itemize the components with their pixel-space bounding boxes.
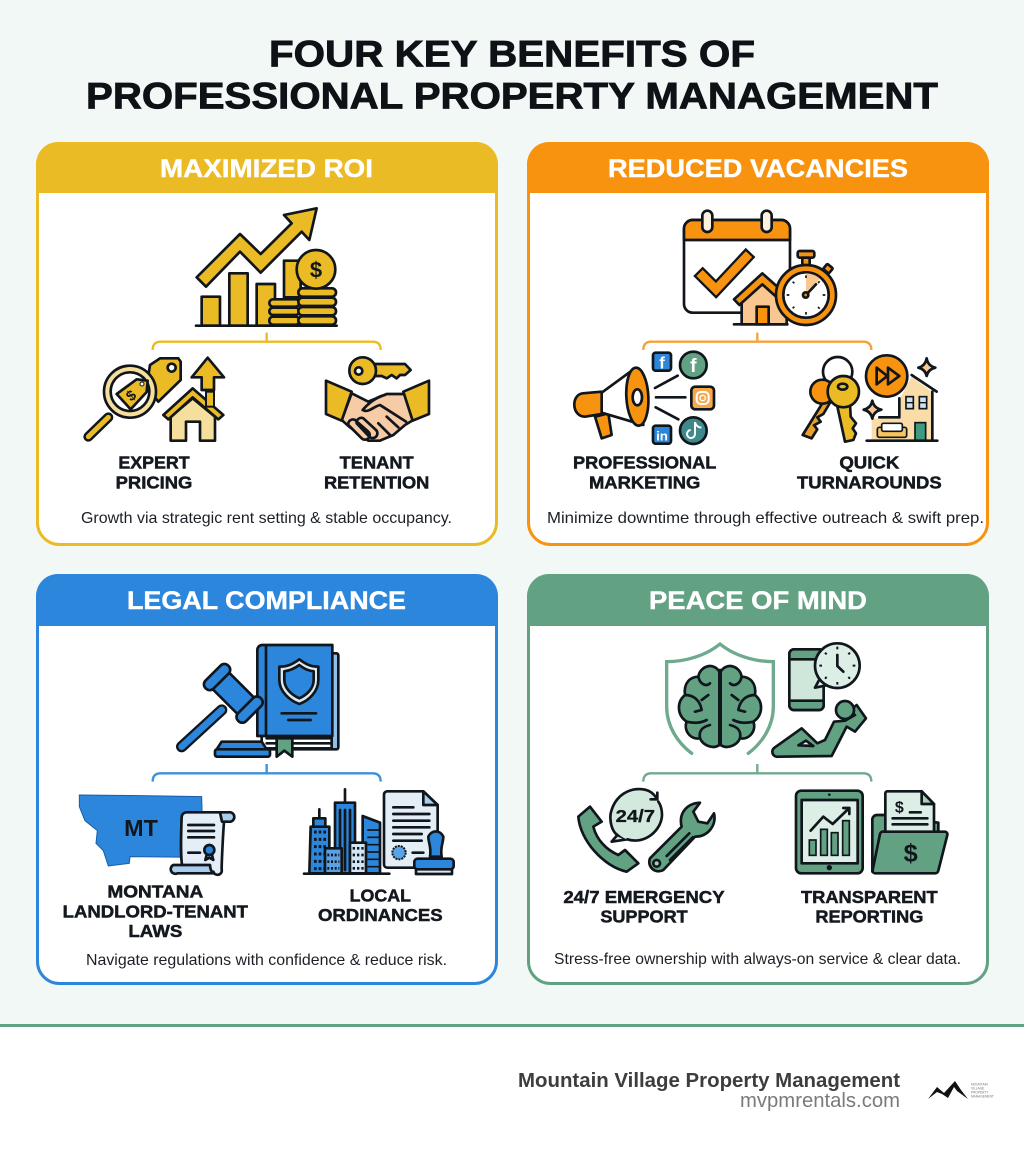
label: Montana line 2: LANDLORD-TENANT: [63, 901, 248, 921]
icon: growth chart with coins: $: [310, 257, 322, 282]
label: Montana landlord-tenant laws: MONTANA: [107, 882, 203, 902]
panel contents: reduced vacancies: [573, 211, 942, 492]
panel header: legal compliance: [36, 574, 498, 626]
icon: tablet report and folder: $: [895, 799, 904, 816]
icon: megaphone and social channels: in: [656, 428, 668, 443]
icon: 24/7 phone and wrench: 24/7: [616, 806, 655, 826]
footer website: mvpmrentals.com: [740, 1090, 900, 1112]
panel contents: peace of mind: [563, 643, 947, 927]
footer company name: Mountain Village Property Management: [518, 1070, 900, 1092]
icon: gavel and law book: [182, 645, 338, 757]
heading: maximized ROI: MAXIMIZED ROI: [160, 155, 373, 183]
icon: 24/7 phone and wrench: [578, 789, 714, 872]
label: quick turnarounds: QUICK: [839, 452, 899, 472]
caption: reduced vacancies: Minimize downtime through effective outreach & swift prep.: [547, 510, 984, 527]
label: transparent reporting line 2: REPORTING: [815, 907, 923, 927]
panel header: maximized ROI: [36, 142, 498, 193]
label: professional marketing line 2: MARKETING: [589, 472, 700, 492]
title: PROFESSIONAL PROPERTY MANAGEMENT: [86, 76, 938, 116]
heading: reduced vacancies: REDUCED VACANCIES: [608, 155, 908, 183]
icon: growth chart with coins: [196, 208, 337, 326]
title: [86, 34, 938, 116]
icon: tablet report and folder: [796, 791, 947, 873]
icon: shield, brain, phone and relaxing person: [667, 643, 866, 757]
icon: expert pricing: $: [123, 388, 140, 405]
icon: tenant retention: [326, 357, 429, 441]
label: tenant retention: TENANT: [340, 452, 414, 472]
icon: keys and fast-forward house: [803, 355, 937, 442]
label: 24/7 emergency support: 24/7 EMERGENCY: [563, 887, 725, 907]
icon: city and ordinance stamp: [304, 789, 454, 874]
panel: peace of mind: [527, 574, 989, 984]
label: expert pricing: EXPERT: [118, 452, 190, 472]
label: 24/7 line 2: SUPPORT: [600, 907, 688, 927]
label: tenant retention line 2: RETENTION: [324, 472, 429, 492]
logo: mountains: VILLAGE: [971, 1086, 984, 1090]
caption: legal compliance: Navigate regulations with confidence & reduce risk.: [86, 952, 447, 969]
icon: megaphone and social channels: f: [659, 354, 665, 373]
logo: mountains: MOUNTAIN: [971, 1082, 988, 1086]
label: local ordinances line 2: ORDINANCES: [318, 905, 443, 925]
heading: legal compliance: LEGAL COMPLIANCE: [127, 587, 406, 615]
logo: mountains: MANAGEMENT: [971, 1094, 994, 1098]
label: professional marketing: PROFESSIONAL: [573, 452, 716, 472]
icon: megaphone and social channels: [574, 352, 714, 444]
logo: mountains: [928, 1081, 994, 1099]
connector: [643, 764, 871, 782]
panel contents: legal compliance: [63, 645, 454, 941]
footer: [0, 1024, 1024, 1154]
label: Montana line 3: LAWS: [128, 921, 182, 941]
heading: peace of mind: PEACE OF MIND: [649, 587, 867, 615]
label: expert pricing line 2: PRICING: [116, 472, 192, 492]
icon: Montana map and scroll: [79, 795, 234, 875]
connector: [153, 764, 381, 782]
panel: legal compliance: [36, 574, 498, 984]
logo: mountains: PROPERTY: [971, 1090, 989, 1094]
panel contents: maximized ROI: [88, 208, 429, 492]
label: local ordinances: LOCAL: [350, 885, 411, 905]
caption: maximized ROI: Growth via strategic rent setting & stable occupancy.: [81, 510, 452, 527]
panel header: reduced vacancies: [527, 142, 989, 193]
connector: [153, 333, 381, 350]
panel: reduced vacancies: [527, 142, 989, 544]
panel header: peace of mind: [527, 574, 989, 626]
icon: Montana map and scroll: MT: [124, 815, 158, 841]
connector: [643, 333, 871, 350]
icon: tablet report and folder: $: [904, 840, 918, 868]
icon: megaphone and social channels: f: [690, 356, 697, 377]
panel: maximized ROI: [36, 142, 498, 544]
title: FOUR KEY BENEFITS OF: [269, 34, 755, 74]
label: quick turnarounds line 2: TURNAROUNDS: [797, 472, 942, 492]
icon: calendar, house and stopwatch: [684, 211, 836, 325]
label: transparent reporting: TRANSPARENT: [801, 887, 938, 907]
icon: expert pricing: [88, 358, 224, 441]
caption: peace of mind: Stress-free ownership with always-on service & clear data.: [554, 951, 961, 968]
